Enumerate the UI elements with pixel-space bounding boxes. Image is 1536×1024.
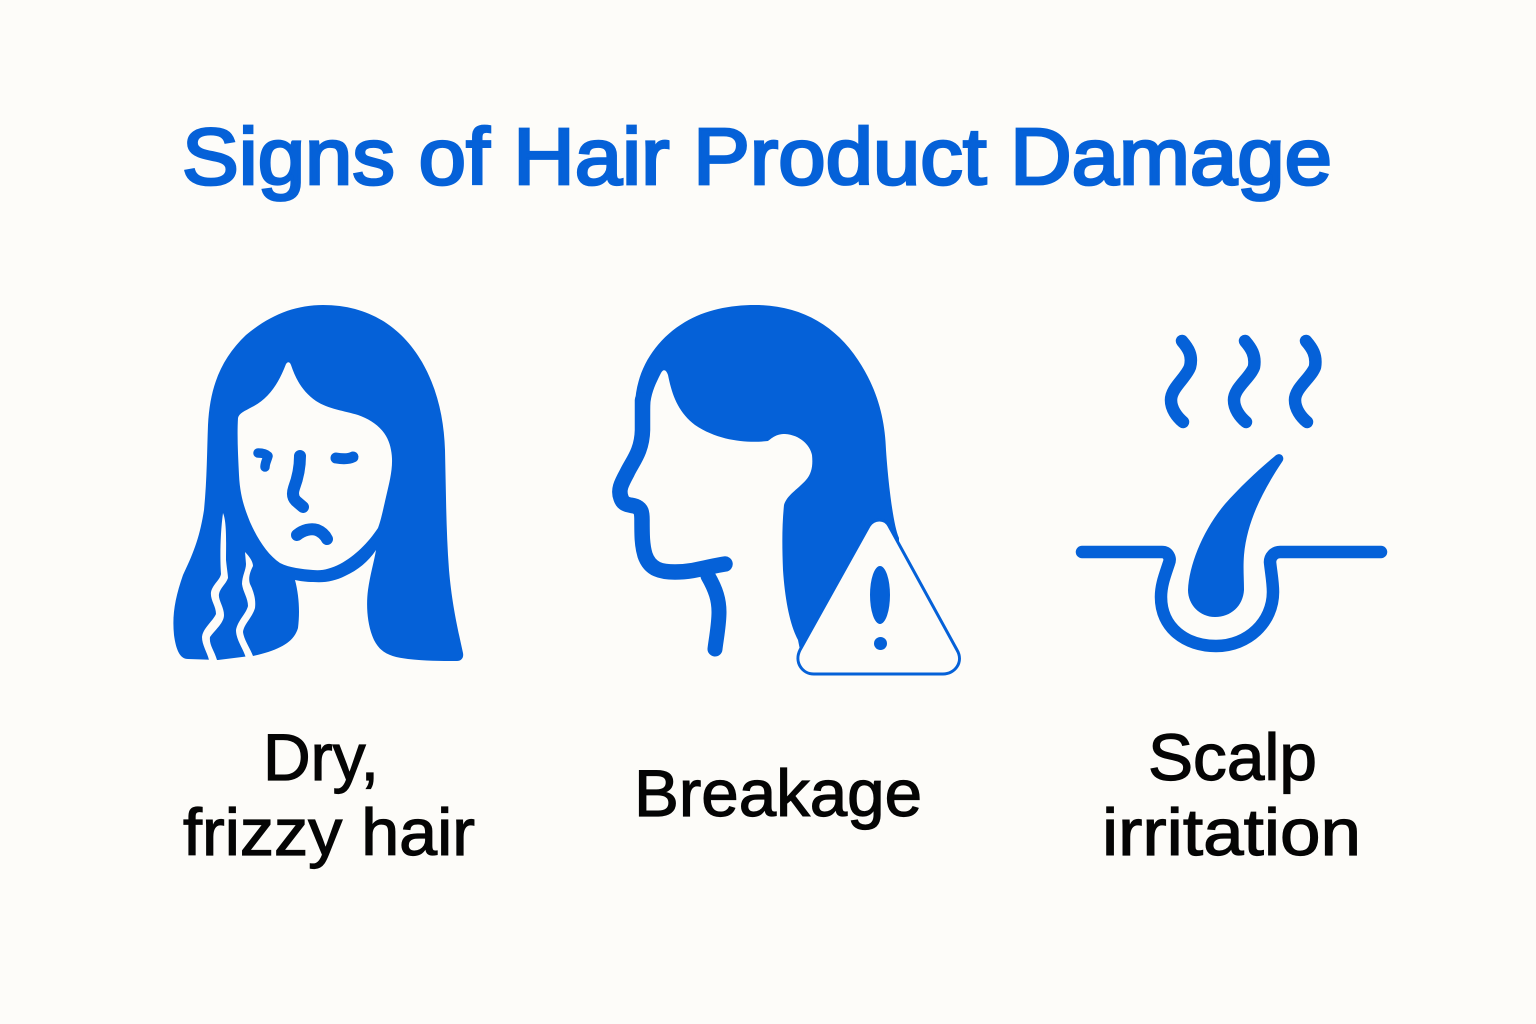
exclamation mark <box>870 566 890 650</box>
heat waves <box>1171 341 1315 422</box>
frizz strand right <box>236 552 255 658</box>
icon: profile head with warning <box>620 305 959 674</box>
hair shaft <box>1188 454 1283 617</box>
face outline <box>620 400 725 572</box>
label: scalp irritation: irritation <box>1102 795 1361 869</box>
left eye <box>258 453 268 467</box>
panel: dry, frizzy hair <box>173 305 475 869</box>
label: dry, frizzy hair: frizzy hair <box>183 795 475 869</box>
title: Signs of Hair Product Damage <box>182 112 1332 201</box>
label: dry, frizzy hair <box>183 720 475 869</box>
label: scalp irritation <box>1102 720 1361 869</box>
panel: scalp irritation <box>1082 341 1381 869</box>
frown <box>297 529 327 539</box>
warning triangle <box>798 520 959 674</box>
frizz strand left <box>202 513 228 660</box>
icon: woman with frizzy hair <box>173 305 463 661</box>
hair and head outline <box>635 305 899 650</box>
nose <box>293 456 303 507</box>
scalp line and follicle <box>1082 552 1381 646</box>
hair silhouette <box>173 305 463 661</box>
label: dry, frizzy hair: Dry, <box>263 720 379 794</box>
face <box>238 362 392 570</box>
label: scalp irritation: Scalp <box>1148 720 1317 794</box>
icon: irritated hair follicle <box>1082 341 1381 646</box>
right eye <box>336 457 353 459</box>
neck line <box>708 576 719 649</box>
label: breakage: Breakage <box>634 756 922 830</box>
panel: breakage <box>620 305 959 830</box>
